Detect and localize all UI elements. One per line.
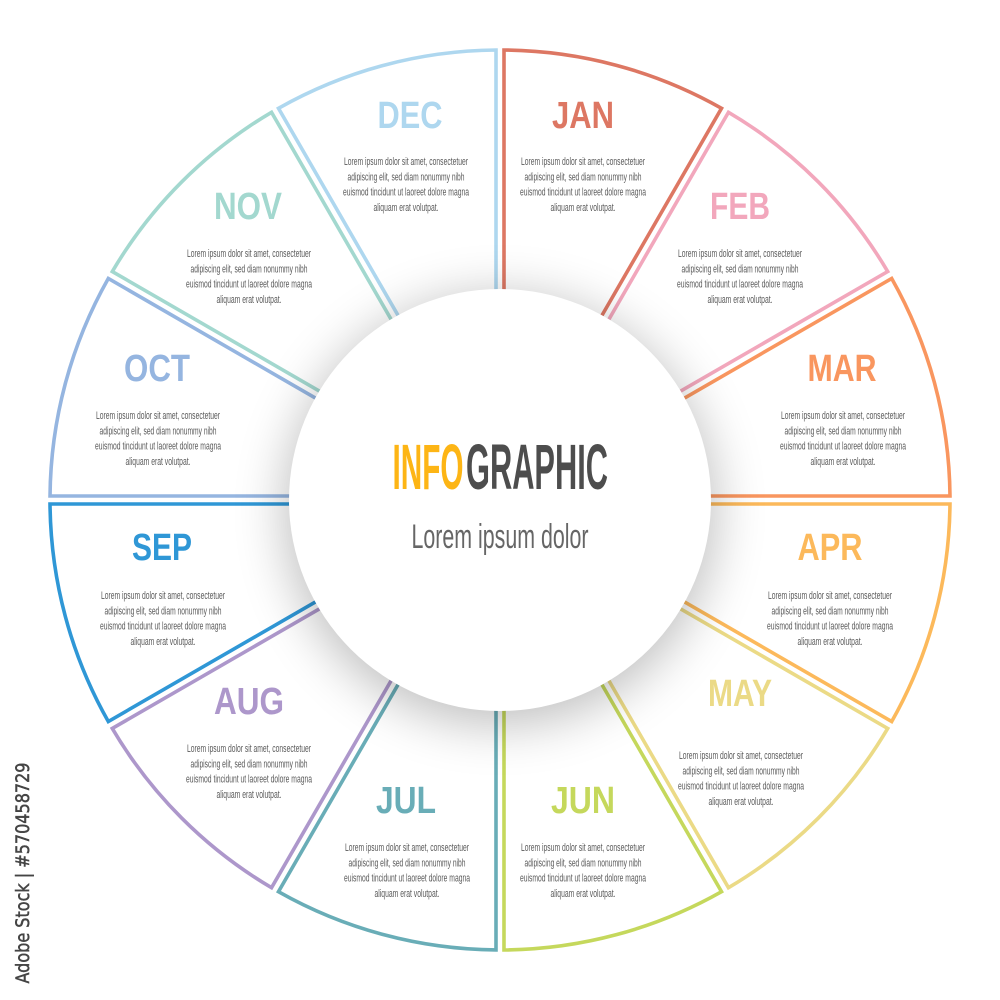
- FEB heading: FEB: [710, 186, 770, 228]
- MAR body text: [780, 410, 907, 468]
- AUG body text: euismod tincidunt ut laoreet dolore magna: [186, 774, 313, 786]
- watermark id: Adobe Stock | #570458729: [12, 762, 34, 984]
- MAY heading: MAY: [708, 673, 772, 715]
- OCT body text: euismod tincidunt ut laoreet dolore magna: [95, 441, 222, 453]
- JUL body text: aliquam erat volutpat.: [374, 888, 440, 900]
- JAN body text: euismod tincidunt ut laoreet dolore magna: [520, 187, 647, 199]
- FEB body text: euismod tincidunt ut laoreet dolore magna: [677, 279, 804, 291]
- JUL outline: [278, 515, 496, 950]
- JUN body text: euismod tincidunt ut laoreet dolore magna: [520, 873, 647, 885]
- NOV body text: euismod tincidunt ut laoreet dolore magna: [186, 279, 313, 291]
- panel: JAN: [504, 50, 722, 485]
- JUL body text: Lorem ipsum dolor sit amet, consectetuer: [345, 842, 469, 854]
- AUG body text: aliquam erat volutpat.: [216, 789, 282, 801]
- panel: DEC: [278, 0, 684, 485]
- NOV heading: NOV: [214, 186, 283, 228]
- APR body text: [767, 590, 894, 648]
- DEC heading: DEC: [378, 95, 442, 137]
- SEP body text: Lorem ipsum dolor sit amet, consectetuer: [101, 590, 225, 602]
- FEB body text: [677, 248, 804, 306]
- SEP outline: [0, 316, 485, 722]
- APR body text: euismod tincidunt ut laoreet dolore magna: [767, 621, 894, 633]
- panel: SEP: [0, 316, 485, 722]
- AUG body text: adipiscing elit, sed diam nonummy nibh: [190, 758, 308, 770]
- MAR outline: [515, 278, 1000, 684]
- panel: MAY: [402, 511, 888, 917]
- DEC body text: Lorem ipsum dolor sit amet, consectetuer: [344, 156, 468, 168]
- OCT body text: Lorem ipsum dolor sit amet, consectetuer: [96, 410, 220, 422]
- panel: OCT: [50, 278, 485, 496]
- panel: NOV: [112, 83, 598, 489]
- MAY body text: [678, 750, 805, 808]
- FEB outline: [511, 112, 917, 598]
- JAN body text: aliquam erat volutpat.: [550, 202, 616, 214]
- JAN outline: [504, 50, 722, 485]
- MAY body text: adipiscing elit, sed diam nonummy nibh: [682, 765, 800, 777]
- APR body text: adipiscing elit, sed diam nonummy nibh: [772, 605, 888, 617]
- JUL body text: adipiscing elit, sed diam nonummy nibh: [348, 857, 466, 869]
- APR body text: Lorem ipsum dolor sit amet, consectetuer: [768, 590, 892, 602]
- JUN body text: [520, 842, 647, 900]
- AUG heading: AUG: [214, 681, 284, 723]
- APR heading: APR: [798, 527, 862, 569]
- NOV body text: Lorem ipsum dolor sit amet, consectetuer: [187, 248, 311, 260]
- title: INFO: [392, 431, 464, 503]
- OCT body text: aliquam erat volutpat.: [126, 456, 190, 468]
- OCT body text: adipiscing elit, sed diam nonummy nibh: [100, 425, 216, 437]
- JUL body text: [344, 842, 471, 900]
- DEC body text: euismod tincidunt ut laoreet dolore magna: [343, 187, 470, 199]
- JAN body text: Lorem ipsum dolor sit amet, consectetuer: [521, 156, 645, 168]
- MAY body text: euismod tincidunt ut laoreet dolore magna: [678, 781, 805, 793]
- center circle with shadow: [286, 289, 714, 724]
- NOV body text: [186, 248, 313, 306]
- FEB body text: adipiscing elit, sed diam nonummy nibh: [682, 263, 798, 275]
- FEB body text: aliquam erat volutpat.: [708, 294, 772, 306]
- SEP body text: adipiscing elit, sed diam nonummy nibh: [104, 605, 222, 617]
- MAY body text: aliquam erat volutpat.: [708, 796, 774, 808]
- panel: AUG: [83, 402, 489, 888]
- NOV body text: adipiscing elit, sed diam nonummy nibh: [190, 263, 308, 275]
- MAY body text: Lorem ipsum dolor sit amet, consectetuer: [679, 750, 803, 762]
- AUG body text: [186, 743, 313, 801]
- DEC outline: [278, 0, 684, 485]
- SEP body text: [100, 590, 227, 648]
- AUG body text: Lorem ipsum dolor sit amet, consectetuer: [187, 743, 311, 755]
- SEP body text: euismod tincidunt ut laoreet dolore magna: [100, 621, 227, 633]
- AUG outline: [83, 402, 489, 888]
- NOV outline: [112, 83, 598, 489]
- APR body text: aliquam erat volutpat.: [798, 636, 862, 648]
- OCT outline: [50, 278, 485, 496]
- JUN body text: aliquam erat volutpat.: [550, 888, 616, 900]
- JUL body text: euismod tincidunt ut laoreet dolore magna: [344, 873, 471, 885]
- JAN body text: adipiscing elit, sed diam nonummy nibh: [524, 171, 642, 183]
- NOV body text: aliquam erat volutpat.: [216, 294, 282, 306]
- panel: APR: [515, 504, 950, 722]
- center circle with shadow: GRAPHIC: [466, 431, 608, 503]
- JAN body text: [520, 156, 647, 214]
- DEC body text: adipiscing elit, sed diam nonummy nibh: [348, 171, 464, 183]
- DEC body text: aliquam erat volutpat.: [374, 202, 438, 214]
- JUN outline: [316, 515, 722, 1000]
- JUN body text: Lorem ipsum dolor sit amet, consectetuer: [521, 842, 645, 854]
- SEP heading: SEP: [132, 527, 192, 569]
- panel: MAR: [515, 278, 1000, 684]
- MAY outline: [402, 511, 888, 917]
- MAR body text: adipiscing elit, sed diam nonummy nibh: [784, 425, 902, 437]
- MAR body text: Lorem ipsum dolor sit amet, consectetuer: [781, 410, 905, 422]
- MAR body text: aliquam erat volutpat.: [810, 456, 876, 468]
- MAR heading: MAR: [808, 348, 876, 390]
- JUL heading: JUL: [376, 780, 436, 822]
- SEP body text: aliquam erat volutpat.: [130, 636, 196, 648]
- OCT heading: OCT: [124, 348, 190, 390]
- JUN heading: JUN: [551, 780, 615, 822]
- FEB body text: Lorem ipsum dolor sit amet, consectetuer: [678, 248, 802, 260]
- panel: FEB: [511, 112, 917, 598]
- OCT body text: [95, 410, 222, 468]
- panel: JUN: [316, 515, 722, 1000]
- MAR body text: euismod tincidunt ut laoreet dolore magna: [780, 441, 907, 453]
- JAN heading: JAN: [552, 95, 614, 137]
- DEC body text: [343, 156, 470, 214]
- APR outline: [515, 504, 950, 722]
- subtitle: Lorem ipsum dolor: [412, 518, 588, 556]
- panel: JUL: [278, 515, 496, 950]
- JUN body text: adipiscing elit, sed diam nonummy nibh: [524, 857, 642, 869]
